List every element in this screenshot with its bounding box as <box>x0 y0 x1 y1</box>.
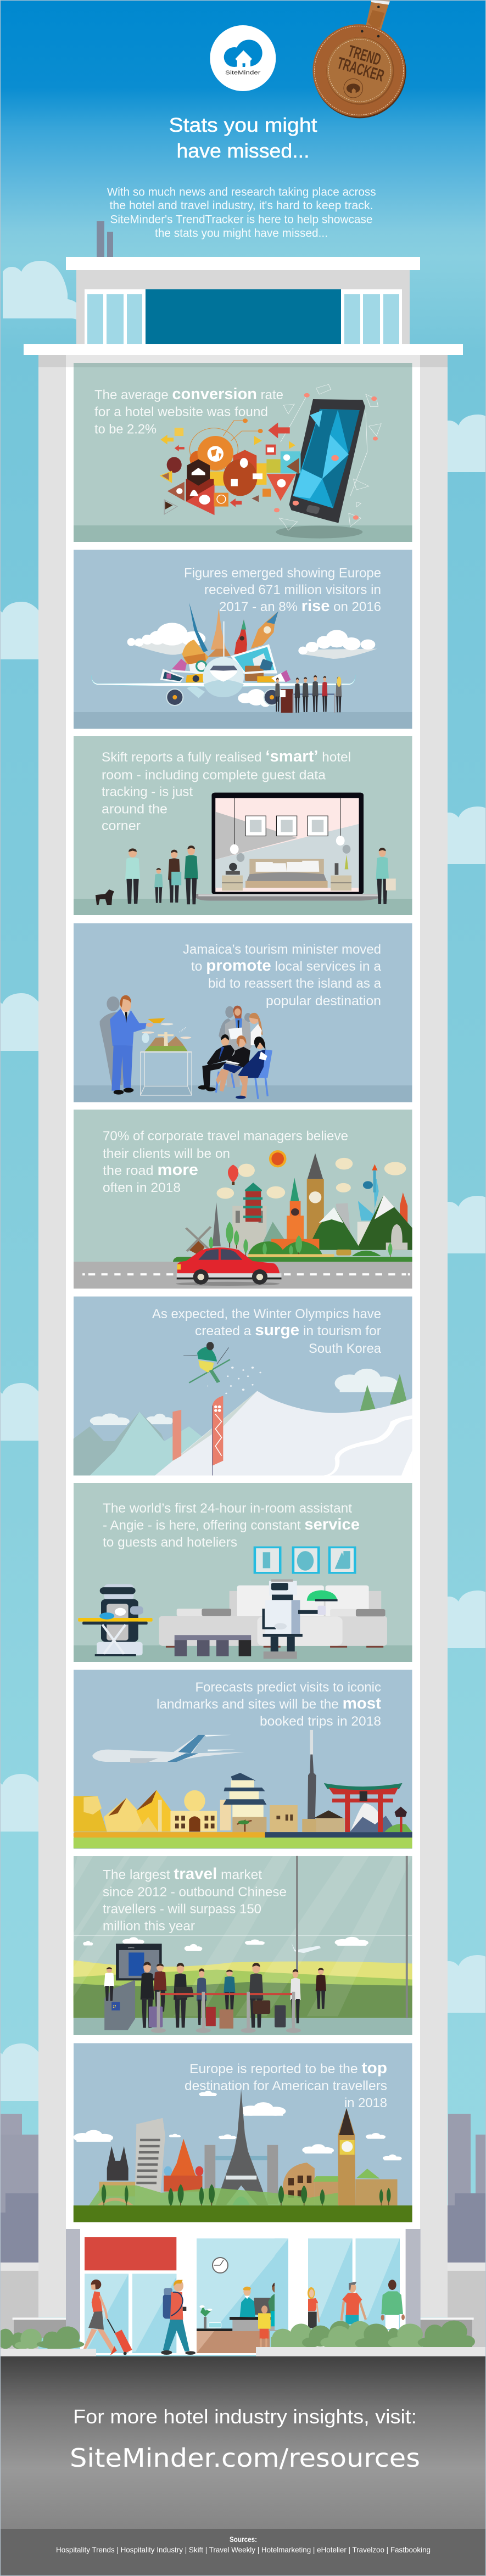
text: smart room stat: corner <box>102 819 141 833</box>
plane and landmarks illustration <box>91 602 377 713</box>
guest with child <box>258 2282 287 2348</box>
text: conversion stat: for a hotel website was found <box>94 405 268 419</box>
receptionist <box>240 2287 255 2317</box>
panel 8: iconic landmarks <box>74 1670 412 1849</box>
car and landmarks illustration <box>82 1150 412 1286</box>
text: corporate travel stat: their clients will be on <box>103 1146 230 1161</box>
title: Stats you might <box>169 114 317 136</box>
text: Chinese travellers stat: million this year <box>103 1919 195 1934</box>
panel 3: smart hotel room <box>74 736 412 915</box>
sources bar <box>0 2529 486 2576</box>
icon cluster and phone illustration <box>160 384 381 539</box>
guest: blonde woman <box>308 2287 319 2328</box>
text: Chinese travellers stat <box>103 1866 287 1934</box>
sources bar: Sources: <box>230 2535 257 2544</box>
laptop room and guests illustration <box>96 793 396 905</box>
presenter and audience illustration <box>100 995 272 1099</box>
title: have missed... <box>177 139 310 162</box>
panel 1: conversion rate <box>74 363 412 542</box>
tag lettering: TRACKER <box>335 54 386 85</box>
lobby facade right half <box>275 2229 474 2347</box>
text: Winter Olympics stat: created a surge in tourism for <box>195 1321 381 1339</box>
text: Europe visitors stat: Figures emerged showing Europe <box>184 565 381 581</box>
guest: man in red t-shirt <box>342 2282 366 2324</box>
presenter with shadow <box>100 995 153 1095</box>
panel 4: Jamaica tourism <box>74 923 412 1102</box>
text: assistant stat: The world’s first 24-hour in-room assistant <box>103 1501 352 1516</box>
text: assistant stat <box>103 1501 360 1550</box>
departures board <box>116 1944 162 1980</box>
text: smart room stat <box>102 748 351 833</box>
text: landmarks stat: landmarks and sites will be the most <box>157 1695 381 1712</box>
audience <box>198 1006 272 1099</box>
red car <box>176 1247 281 1286</box>
title <box>169 114 317 162</box>
text: Europe destination stat: destination for American travellers <box>185 2079 387 2093</box>
call to action text: For more hotel industry insights, visit: <box>73 2405 417 2428</box>
panel 7: in-room assistant <box>74 1483 412 1662</box>
robot at ironing board <box>78 1584 153 1656</box>
bushes and pavements <box>0 2321 486 2356</box>
text: smart room stat: tracking - is just <box>102 785 193 799</box>
robot with tray <box>263 1579 338 1659</box>
intro paragraph: With so much news and research taking place across <box>107 186 376 199</box>
text: landmarks stat: Forecasts predict visits to iconic <box>195 1680 381 1695</box>
text: Europe destination stat: Europe is reported to be the top <box>189 2059 387 2077</box>
website address: SiteMinder.com/resources <box>70 2443 420 2473</box>
logo: SiteMinder <box>210 25 276 91</box>
tag lettering <box>335 42 386 85</box>
sources bar: Hospitality Trends | Hospitality Industry | Skift | Travel Weekly | Hotelmarketing | eHotelier | Travelzoo | Fastbooking <box>56 2545 431 2554</box>
text: Winter Olympics stat: South Korea <box>309 1341 382 1356</box>
text: conversion stat: The average conversion rate <box>94 385 283 403</box>
text: Europe visitors stat: 2017 - an 8% rise on 2016 <box>219 597 381 615</box>
text: landmarks stat: booked trips in 2018 <box>260 1714 381 1729</box>
text: smart room stat: Skift reports a fully realised ‘smart’ hotel <box>102 748 351 765</box>
panel 5: corporate travel <box>74 1110 412 1289</box>
panel 10: Europe top destination <box>74 2043 412 2222</box>
text: conversion stat: to be 2.2% <box>94 422 157 437</box>
background skyline <box>0 2114 486 2350</box>
text: corporate travel stat: the road more <box>103 1161 198 1179</box>
text: landmarks stat <box>157 1680 381 1729</box>
text: corporate travel stat: 70% of corporate travel managers believe <box>103 1129 348 1144</box>
robots and sofa illustration <box>78 1547 387 1659</box>
text: Jamaica stat: Jamaica’s tourism minister moved <box>183 942 381 957</box>
skier <box>183 1342 230 1383</box>
hotel lobby entrance <box>0 2229 486 2356</box>
text: Chinese travellers stat: travellers - will surpass 150 <box>103 1902 261 1917</box>
side clouds <box>0 261 486 2103</box>
text: Winter Olympics stat: As expected, the Winter Olympics have <box>152 1307 381 1321</box>
panel 2: Europe visitors <box>74 550 412 729</box>
text: conversion stat <box>94 385 283 437</box>
text: Jamaica stat: bid to reassert the island as a <box>208 976 382 991</box>
text: Europe destination stat <box>185 2059 387 2110</box>
chimneys <box>97 221 113 257</box>
tag lettering: TREND <box>346 42 383 69</box>
intro paragraph: the hotel and travel industry, it's hard to keep track. <box>110 199 373 212</box>
woman with red suitcase <box>79 2280 132 2355</box>
airport window and queue illustration <box>74 1856 412 2035</box>
text: smart room stat: around the <box>102 802 167 817</box>
text: Europe visitors stat <box>184 565 381 615</box>
text: assistant stat: - Angie - is here, offering constant service <box>103 1516 360 1533</box>
text: Jamaica stat <box>183 942 382 1009</box>
text: smart room stat: room - including complete guest data <box>102 768 326 783</box>
departures board: DEPARTURES <box>128 1946 135 1949</box>
text: assistant stat: to guests and hoteliers <box>103 1535 237 1550</box>
logo: SiteMinder: SiteMinder <box>225 70 261 76</box>
text: corporate travel stat: often in 2018 <box>103 1180 181 1195</box>
airport window and queue illustration: 17 <box>113 2004 116 2009</box>
text: Jamaica stat: popular destination <box>266 994 381 1009</box>
table with diorama <box>141 1018 192 1095</box>
man with backpack <box>161 2280 195 2355</box>
intro paragraph: the stats you might have missed... <box>155 227 328 239</box>
intro paragraph <box>107 186 376 239</box>
panel 9: Chinese travellers <box>74 1856 412 2035</box>
text: Jamaica stat: to promote local services in a <box>191 957 382 975</box>
text: Europe visitors stat: received 671 million visitors in <box>204 583 381 597</box>
ski slope illustration <box>74 1342 412 1475</box>
text: Europe destination stat: in 2018 <box>344 2096 387 2110</box>
lobby facade left half <box>13 2229 287 2355</box>
intro paragraph: SiteMinder's TrendTracker is here to help showcase <box>110 213 372 226</box>
plane and world landmarks illustration <box>74 1730 412 1849</box>
text: corporate travel stat <box>103 1129 348 1195</box>
panel 6: Winter Olympics <box>74 1297 412 1476</box>
text: Winter Olympics stat <box>152 1307 382 1356</box>
building: penthouse <box>66 257 420 344</box>
footer call to action <box>0 2356 486 2529</box>
building: tower body <box>24 344 463 2317</box>
guest: man in green sweater <box>381 2280 405 2329</box>
text: Chinese travellers stat: since 2012 - outbound Chinese <box>103 1885 287 1900</box>
luggage tag: Trend Tracker <box>312 0 406 118</box>
European landmarks illustration <box>74 2090 412 2222</box>
text: Chinese travellers stat: The largest travel market <box>103 1866 262 1883</box>
